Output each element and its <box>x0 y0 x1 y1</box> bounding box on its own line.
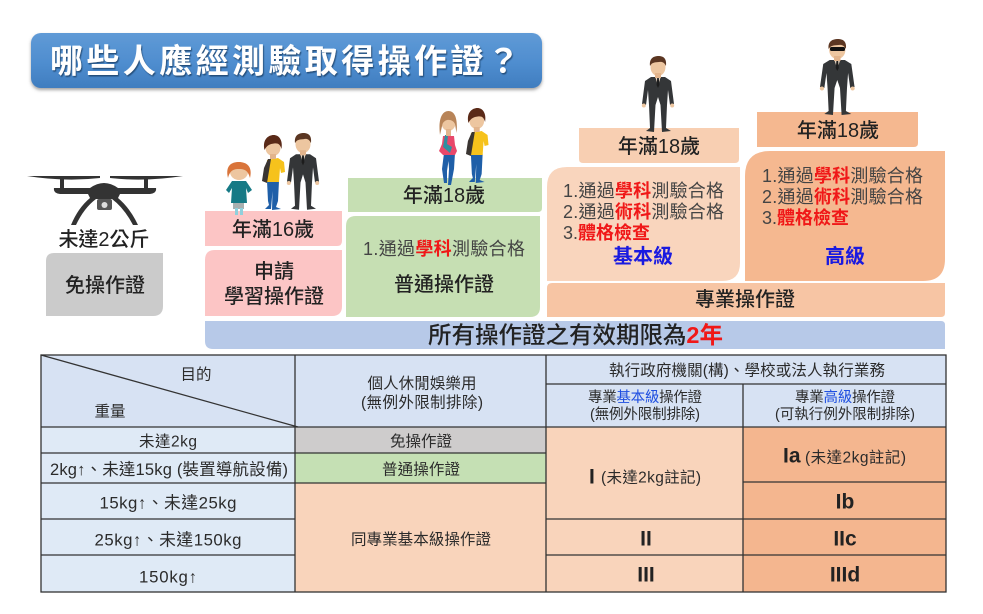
personal use column <box>351 432 491 548</box>
figure: girl <box>439 111 457 185</box>
figure: man in suit <box>642 56 674 132</box>
basic level column: III <box>637 564 655 586</box>
validity bar: 所有操作證之有效期限為2年 <box>428 322 723 348</box>
learner permit box <box>205 250 342 316</box>
validity bar <box>205 321 945 349</box>
advanced level box <box>745 151 945 281</box>
weight column: 15kg↑、未達25kg <box>100 494 236 512</box>
panel: general permit <box>346 178 542 317</box>
professional permit bar: 專業操作證 <box>695 288 795 311</box>
table header cells: (無例外限制排除) <box>590 406 700 423</box>
table header cells: (無例外限制排除) <box>361 394 483 412</box>
figure: boy <box>466 108 489 183</box>
advanced level box: 2.通過術科測驗合格 <box>762 186 923 207</box>
panel: professional permit <box>547 112 945 317</box>
advanced level column: (未達2kg註記) <box>805 448 906 466</box>
age 18 step <box>348 178 542 212</box>
table header cells: 目的 <box>180 366 212 384</box>
basic level box: 基本級 <box>613 245 673 268</box>
advanced level box: 1.通過學科測驗合格 <box>762 166 923 186</box>
weight column: 25kg↑、未達150kg <box>94 530 242 550</box>
table header cells: 專業基本級操作證 <box>588 389 702 406</box>
figure: man with sunglasses <box>820 39 855 115</box>
figures: kid, boy and man <box>226 133 319 215</box>
advanced level column: Ib <box>836 490 854 514</box>
table header cells: 專業高級操作證 <box>795 389 896 406</box>
basic level box: 2.通過術科測驗合格 <box>563 201 724 222</box>
panel: exempt: 免操作證 <box>65 274 145 297</box>
advanced level column: IIId <box>830 564 860 586</box>
general permit box: 1.通過學科測驗合格 <box>363 239 525 259</box>
weight column <box>50 432 288 586</box>
general permit box: 普通操作證 <box>394 273 494 296</box>
personal use column: 免操作證 <box>390 432 452 450</box>
age 18 basic step <box>579 128 739 163</box>
age 18 advanced step <box>757 112 918 147</box>
professional permit bar <box>547 283 945 317</box>
personal use column: 同專業基本級操作證 <box>351 530 491 548</box>
age 18 step: 年滿18歲 <box>403 184 485 207</box>
advanced level box: 3.體格檢查 <box>762 207 849 228</box>
learner permit box: 學習操作證 <box>224 285 324 308</box>
age 18 advanced step: 年滿18歲 <box>797 119 879 142</box>
title text: 哪些人應經測驗取得操作證？ <box>50 42 523 80</box>
basic level column <box>589 466 701 586</box>
title banner <box>31 33 542 88</box>
basic level column: I <box>589 466 595 488</box>
table header cells <box>94 360 915 423</box>
advanced level box: 高級 <box>825 244 865 268</box>
basic level box: 3.體格檢查 <box>563 222 650 243</box>
general permit box <box>346 216 540 317</box>
basic level column: (未達2kg註記) <box>601 468 701 486</box>
weight column: 未達2kg <box>139 432 197 450</box>
advanced level column <box>783 444 906 586</box>
advanced level column: IIc <box>833 528 857 550</box>
panel: learner permit <box>205 211 342 316</box>
basic level column: II <box>640 528 652 550</box>
table header cells: 個人休閒娛樂用 <box>368 374 476 392</box>
weight column: 150kg↑ <box>139 568 197 586</box>
personal use column: 普通操作證 <box>382 460 460 478</box>
age 18 basic step: 年滿18歲 <box>618 135 700 158</box>
table header cells: 執行政府機關(構)、學校或法人執行業務 <box>609 360 885 380</box>
basic level box: 1.通過學科測驗合格 <box>563 181 724 201</box>
learner permit box: 申請 <box>254 260 294 283</box>
table header cells: 重量 <box>94 402 126 420</box>
figure: man <box>287 133 319 210</box>
age 16 step: 年滿16歲 <box>232 218 314 241</box>
figure: kid <box>226 162 252 215</box>
table header cells: (可執行例外限制排除) <box>775 406 915 423</box>
figure: boy <box>262 135 285 210</box>
panel: exempt <box>46 253 163 316</box>
label: under 2 kg: 未達2公斤 <box>58 228 150 251</box>
basic level box <box>547 167 740 281</box>
icon: drone <box>27 176 183 225</box>
figures: girl and boy <box>439 108 489 185</box>
advanced level column: Ia <box>783 444 801 468</box>
permit table <box>41 355 946 592</box>
table cell fills <box>41 355 946 592</box>
weight column: 2kg↑、未達15kg (裝置導航設備) <box>50 460 288 479</box>
